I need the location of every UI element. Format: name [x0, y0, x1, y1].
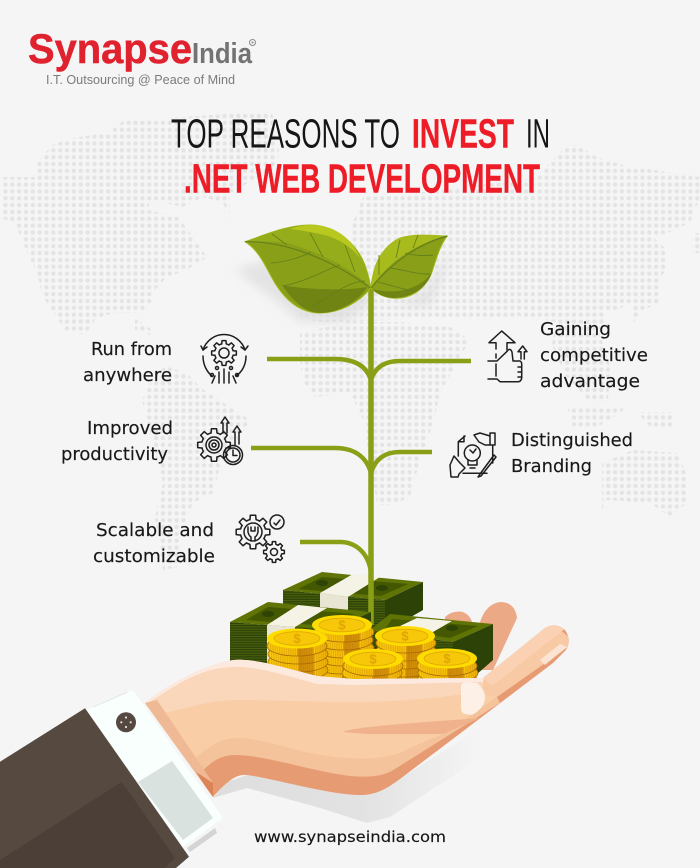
coin stack back right: $ — [401, 628, 409, 644]
back fingers of hand — [445, 602, 517, 670]
money stacks — [230, 288, 493, 685]
logo india: India — [192, 38, 253, 70]
coin stacks — [267, 615, 478, 690]
icon: gear arrows clock — [198, 417, 242, 464]
coin stack left: $ — [293, 631, 301, 646]
finger highlight — [540, 644, 567, 665]
title line one: TOP REASONS TO — [171, 110, 400, 156]
dotted world map — [1, 113, 700, 570]
left leaf — [245, 225, 371, 313]
label: advantage — [540, 371, 640, 392]
hand — [145, 625, 569, 797]
logo wordmark: Synapse — [28, 25, 192, 72]
hand shadow — [213, 727, 482, 823]
label: Scalable and — [96, 520, 214, 541]
label: Distinguished — [511, 430, 633, 451]
logo tagline: I.T. Outsourcing @ Peace of Mind — [46, 73, 235, 87]
label — [511, 430, 633, 477]
central america — [135, 318, 152, 335]
icon: gear with circuits — [201, 335, 248, 383]
coin stack back centre: $ — [338, 618, 346, 632]
item: scalable and customizable — [93, 515, 284, 567]
australia — [602, 450, 688, 517]
title in: IN — [526, 110, 550, 156]
branch: run from anywhere — [267, 359, 371, 380]
icon: hands bulb pencil — [450, 433, 496, 477]
north america and greenland — [1, 113, 279, 335]
label: anywhere — [83, 365, 172, 386]
logo — [28, 25, 256, 87]
leaf shadows — [235, 250, 450, 322]
back money stack — [283, 572, 423, 650]
icon: gears with wrench — [236, 515, 284, 562]
shirt cuff — [87, 690, 223, 852]
label: Branding — [511, 456, 592, 477]
label: productivity — [61, 444, 168, 465]
item: gaining competitive advantage — [488, 319, 648, 392]
label: customizable — [93, 546, 215, 567]
palm mid tone — [154, 697, 500, 777]
label — [93, 520, 215, 567]
label — [83, 339, 172, 386]
coin stack back centre — [312, 615, 374, 682]
coin stack left — [267, 628, 328, 680]
label — [540, 319, 648, 392]
jacket sleeve — [0, 708, 189, 868]
label: Improved — [87, 418, 173, 439]
branch: scalable and customizable — [300, 542, 371, 572]
website url: www.synapseindia.com — [254, 828, 446, 846]
africa — [300, 322, 470, 505]
label: Gaining — [540, 319, 611, 340]
branch: distinguished branding — [371, 452, 432, 473]
item: run from anywhere — [83, 335, 248, 386]
title — [171, 110, 550, 202]
leaves — [245, 225, 447, 313]
coin stack back right — [375, 626, 436, 685]
right leaf — [371, 235, 447, 298]
big finger — [482, 625, 569, 697]
palm rim — [145, 660, 484, 704]
branch: gaining competitive advantage — [371, 361, 471, 380]
label: Run from — [91, 339, 172, 360]
southeast asia — [567, 407, 627, 427]
wrist shading — [145, 700, 213, 798]
eastern islands — [692, 233, 700, 253]
thumb nail — [461, 682, 485, 715]
palm highlight — [150, 660, 484, 712]
right money stack — [370, 614, 493, 685]
indonesia — [637, 412, 673, 427]
palm light tone — [166, 694, 496, 758]
coin stack front right: $ — [443, 651, 451, 666]
item: distinguished branding — [450, 430, 633, 477]
item: improved productivity — [61, 417, 242, 465]
title line two: .NET WEB DEVELOPMENT — [184, 156, 540, 202]
coin stack front right — [417, 648, 478, 690]
label: competitive — [540, 345, 648, 366]
coin stack front centre — [342, 649, 403, 690]
south america — [142, 366, 250, 570]
cuff button — [116, 712, 136, 732]
label — [61, 418, 173, 465]
branch: improved productivity — [251, 448, 371, 473]
icon: thumbs up arrows — [488, 331, 527, 382]
eurasia — [300, 145, 700, 402]
stem — [251, 288, 471, 625]
coin stack front centre: $ — [369, 652, 377, 666]
palm crease — [343, 718, 480, 734]
left money stack — [230, 602, 371, 680]
title invest: INVEST — [412, 110, 514, 156]
registered mark — [250, 40, 256, 46]
